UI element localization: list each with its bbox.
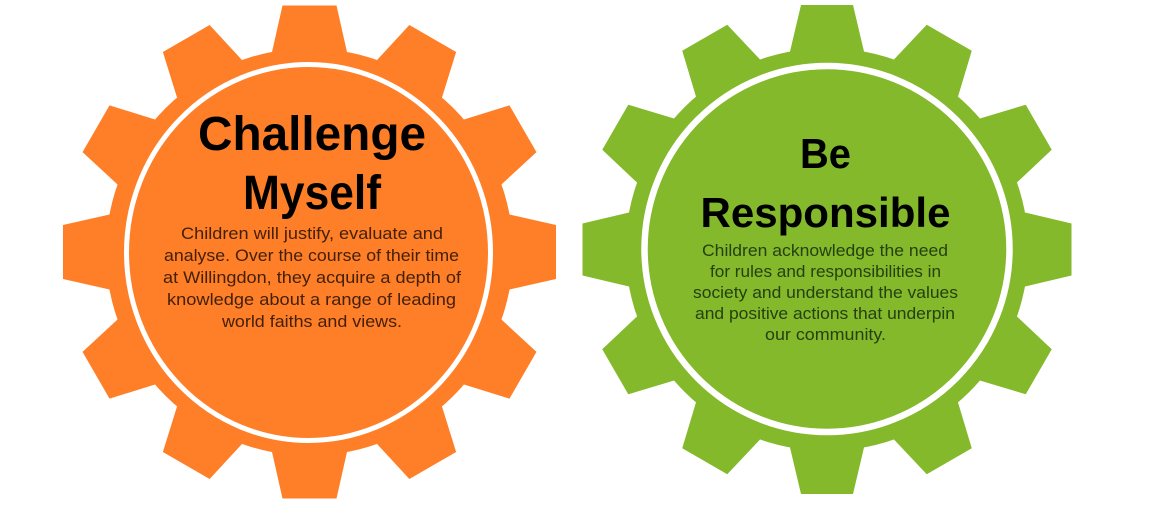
text block: challenge description: analyse. Over the course of their time (164, 246, 459, 265)
text block: responsible description: Children acknowledge the need (702, 241, 948, 260)
heading: Be Responsible (700, 130, 950, 236)
text block: responsible description: for rules and responsibilities in (710, 262, 941, 281)
text block: challenge description: world faiths and views. (221, 312, 402, 331)
heading: Be Responsible: Responsible (700, 189, 950, 236)
heading: Challenge Myself: Challenge (198, 108, 426, 161)
text block: responsible description: our community. (765, 325, 886, 344)
icon: green gear (582, 5, 1072, 494)
white ring (126, 64, 490, 440)
text block: challenge description: Children will justify, evaluate and (181, 224, 443, 243)
text block: challenge description: at Willingdon, they acquire a depth of (163, 268, 461, 287)
panel: challenge myself gear (63, 6, 556, 498)
text block: responsible description (693, 241, 958, 344)
text block: challenge description: knowledge about a range of leading (167, 290, 456, 309)
text block: responsible description: society and understand the values (693, 283, 958, 302)
heading: Be Responsible: Be (800, 130, 851, 177)
icon: orange gear (63, 6, 556, 498)
panel: be responsible gear (582, 5, 1072, 494)
white ring (644, 66, 1010, 432)
heading: Challenge Myself (198, 108, 426, 220)
text block: responsible description: and positive actions that underpin (695, 304, 955, 323)
text block: challenge description (163, 224, 461, 331)
heading: Challenge Myself: Myself (243, 167, 382, 220)
